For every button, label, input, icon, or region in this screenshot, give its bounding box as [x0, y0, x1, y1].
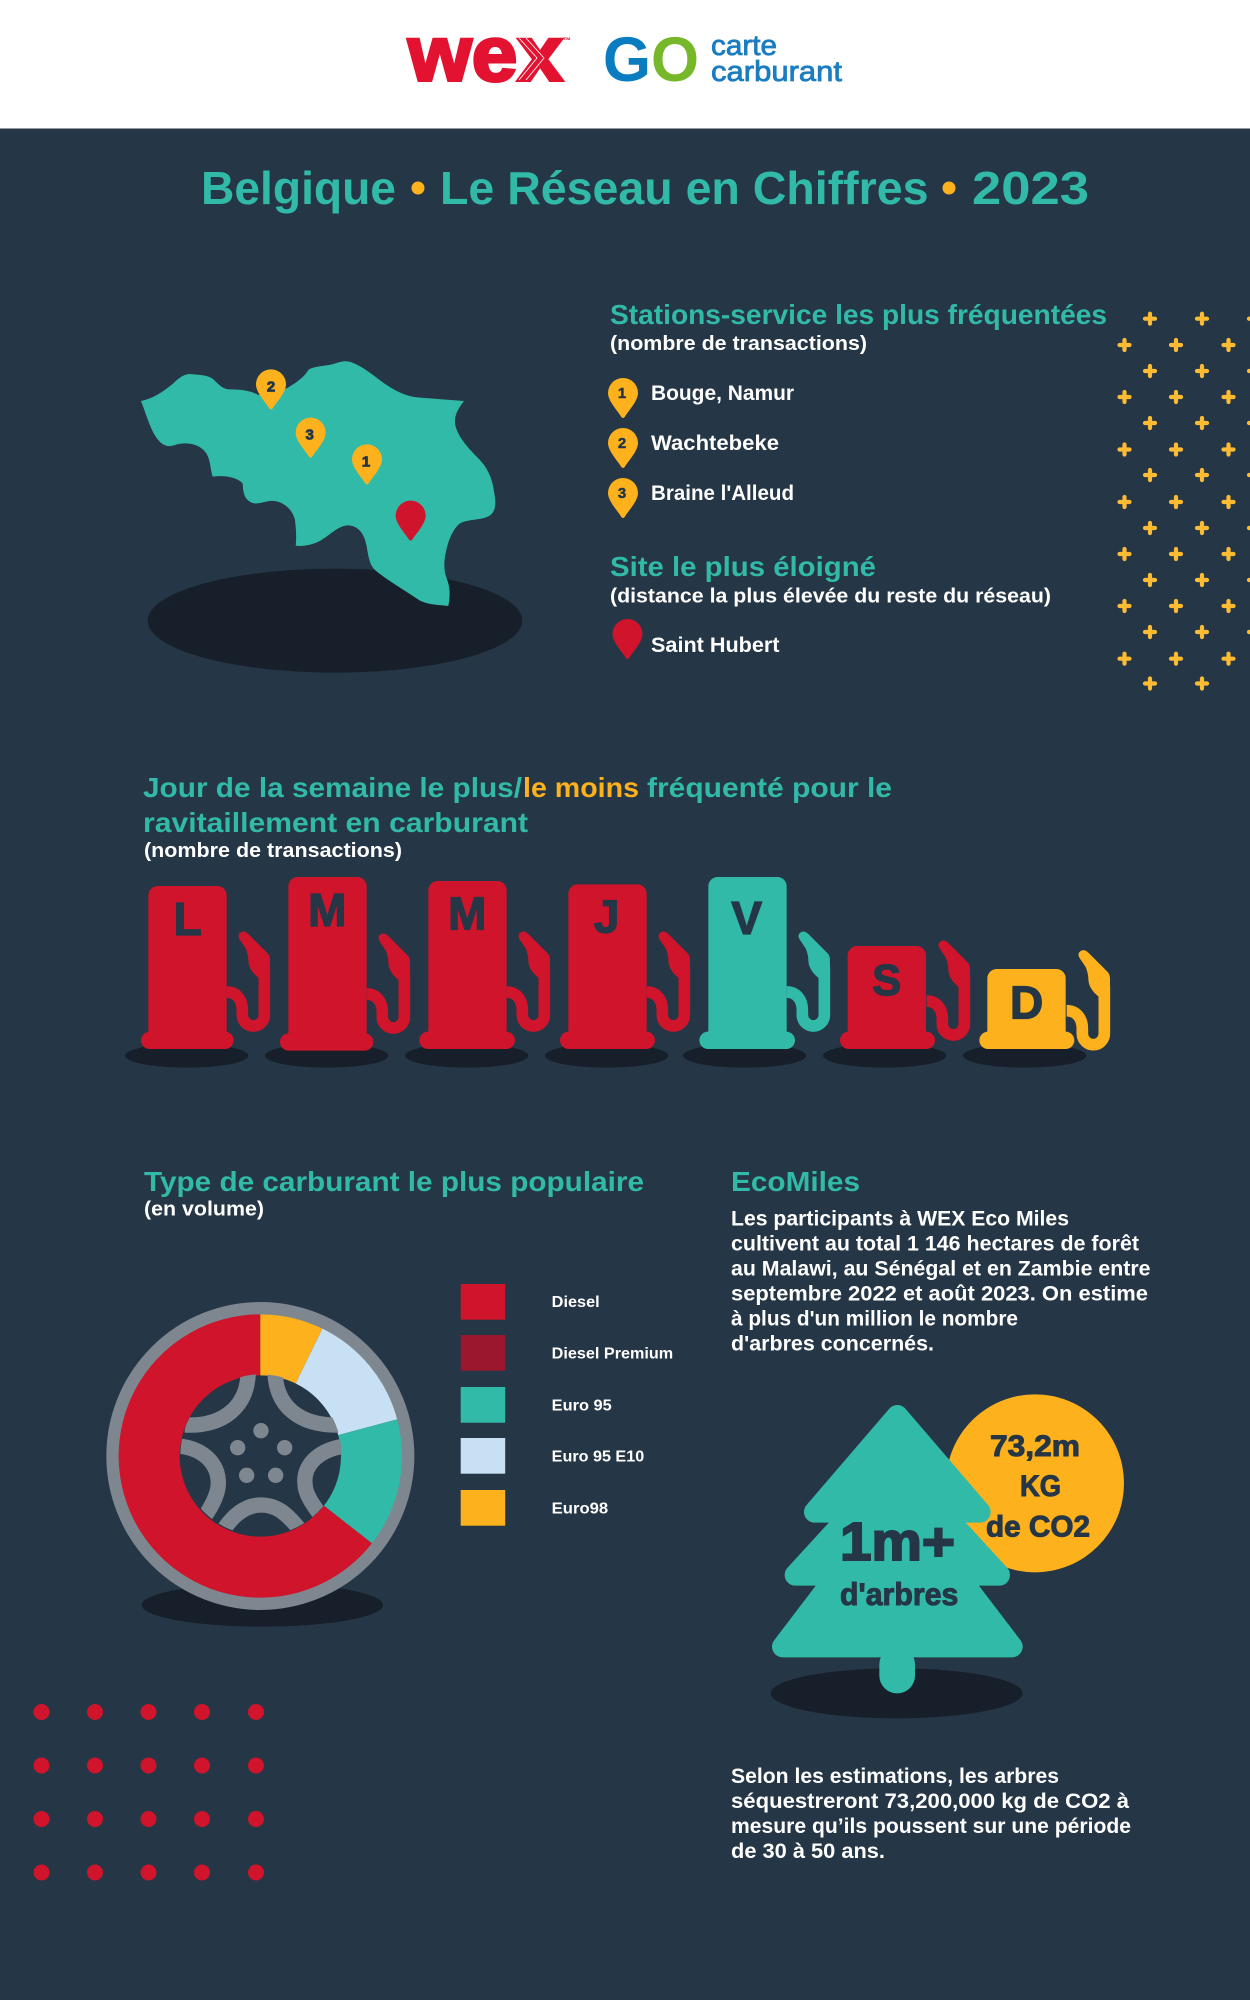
item 1: Bouge, Namur: [651, 382, 794, 405]
pump: Vendredi: V: [731, 892, 762, 944]
segment: Euro 95: [324, 1419, 402, 1543]
text: sequestration estimate: mesure qu’ils poussent sur une période: [731, 1815, 1131, 1838]
text: EcoMiles description: [731, 1208, 1150, 1356]
pattern: plus signs: [1120, 314, 1250, 688]
pump: Jeudi: J: [594, 891, 619, 943]
pump: Samedi: [823, 940, 970, 1068]
segment: Euro 95 E10: [296, 1329, 397, 1435]
stations list: [608, 299, 1107, 518]
header: logos: [0, 0, 1250, 128]
pattern: red dots: [34, 1704, 264, 1880]
logo: GO carte carburant: carburant: [711, 56, 842, 88]
logo: GO carte carburant: [603, 25, 842, 95]
text: sequestration estimate: de 30 à 50 ans.: [731, 1840, 885, 1863]
logo: GO carte carburant: G: [603, 25, 651, 95]
heading: fuel type: [144, 1166, 644, 1220]
pin 2: [256, 369, 286, 409]
pump: Mercredi: M: [448, 887, 486, 939]
pin 2: 2: [267, 378, 275, 395]
illustration: tree and CO2: [771, 1394, 1124, 1718]
legend item: Euro 95 E10: Euro 95 E10: [552, 1449, 644, 1466]
tree label: d'arbres: [840, 1577, 958, 1612]
circle: CO2: de CO2: [986, 1511, 1090, 1544]
segment: Euro98: [260, 1314, 322, 1383]
item 1: 1: [618, 385, 626, 402]
fuel pumps chart: [125, 877, 1110, 1068]
heading: busiest day: fréquenté pour le: [647, 772, 892, 803]
heading: site: Site le plus éloigné: [610, 551, 876, 582]
wheel hub spokes: [178, 1370, 345, 1530]
circle: CO2: [946, 1394, 1124, 1572]
legend item: Euro98: [461, 1490, 608, 1526]
logo: GO carte carburant: carte: [711, 30, 777, 62]
pump: Dimanche: D: [1010, 976, 1043, 1028]
subheading: distance: (distance la plus élevée du reste du réseau): [610, 586, 1051, 608]
pin 1: [352, 444, 382, 484]
heading: busiest day: ravitaillement en carburant: [143, 807, 528, 838]
text: sequestration estimate: [731, 1765, 1131, 1863]
pump: Dimanche: [963, 950, 1110, 1068]
heading: busiest day: [143, 772, 892, 862]
text: sequestration estimate: Selon les estimations, les arbres: [731, 1765, 1059, 1788]
farthest site: [610, 551, 1051, 659]
logo: WEX: ™: [563, 36, 571, 45]
circle: CO2: 73,2m: [990, 1430, 1080, 1463]
heading: EcoMiles: EcoMiles: [731, 1166, 860, 1197]
legend item: Diesel Premium: Diesel Premium: [552, 1346, 673, 1363]
text: EcoMiles description: cultivent au total 1 146 hectares de forêt: [731, 1232, 1139, 1256]
legend item: Diesel Premium: [461, 1335, 673, 1371]
map of Belgium with pins: [141, 361, 522, 673]
pin: Saint Hubert: [396, 501, 426, 541]
pump: Vendredi: [683, 877, 830, 1068]
title: Le Réseau en Chiffres: [440, 162, 928, 214]
legend item: Euro 95 E10: [461, 1438, 644, 1474]
heading: fuel type: (en volume): [144, 1198, 264, 1220]
heading: busiest day: (nombre de transactions): [144, 840, 402, 862]
legend item: Euro98: Euro98: [552, 1501, 608, 1518]
tree label: 1m+: [840, 1513, 955, 1572]
text: sequestration estimate: séquestreront 73,200,000 kg de CO2 à: [731, 1790, 1129, 1813]
text: EcoMiles description: d'arbres concernés.: [731, 1332, 934, 1356]
tree label: [840, 1513, 958, 1612]
heading: busiest day: le moins: [523, 772, 639, 803]
text: EcoMiles description: Les participants à WEX Eco Miles: [731, 1208, 1069, 1230]
pin 3: 3: [305, 427, 314, 444]
title: 2023: [972, 162, 1089, 214]
legend item: Diesel: [461, 1284, 600, 1320]
item 1: [608, 378, 794, 418]
segment: Diesel: [119, 1314, 372, 1598]
item 3: 3: [618, 485, 626, 502]
donut chart: wheel: [113, 1308, 408, 1627]
heading: stations: Stations-service les plus fréquentées: [610, 299, 1107, 330]
pump: Samedi: S: [872, 957, 901, 1005]
legend item: Euro 95: Euro 95: [552, 1398, 612, 1415]
circle: CO2: KG: [1020, 1470, 1061, 1503]
pump: Jeudi: [545, 884, 690, 1068]
pin 3: [296, 418, 326, 458]
legend item: Diesel: Diesel: [552, 1294, 600, 1311]
pump: Lundi: L: [174, 893, 202, 945]
text: EcoMiles description: à plus d'un million le nombre: [731, 1308, 1018, 1330]
pump: Lundi: [125, 886, 270, 1068]
title: Belgique: [201, 162, 396, 214]
heading: busiest day: Jour de la semaine le plus/: [143, 772, 522, 803]
item: Saint Hubert: Saint Hubert: [651, 634, 780, 657]
text: EcoMiles description: septembre 2022 et août 2023. On estime: [731, 1282, 1148, 1306]
pump: Mardi: [265, 877, 410, 1068]
pump: Mardi: M: [308, 884, 346, 936]
item 3: [608, 478, 794, 518]
legend item: Euro 95: [461, 1387, 612, 1423]
item: Saint Hubert: [612, 619, 780, 659]
text: EcoMiles description: au Malawi, au Sénégal et en Zambie entre: [731, 1258, 1150, 1280]
pump: Mercredi: [405, 881, 550, 1068]
tree: [783, 1416, 1012, 1693]
heading: fuel type: Type de carburant le plus populaire: [144, 1166, 644, 1197]
title: [201, 162, 1089, 214]
item 3: Braine l'Alleud: [651, 482, 794, 505]
item 2: Wachtebeke: [651, 432, 779, 455]
pin 1: 1: [362, 453, 370, 470]
subheading: transactions: (nombre de transactions): [610, 333, 867, 355]
logo: WEX: wex: [407, 10, 563, 98]
logo: GO carte carburant: O: [651, 25, 699, 95]
item 2: 2: [618, 435, 626, 452]
legend: fuel types: [461, 1284, 673, 1526]
item 2: [608, 428, 779, 468]
